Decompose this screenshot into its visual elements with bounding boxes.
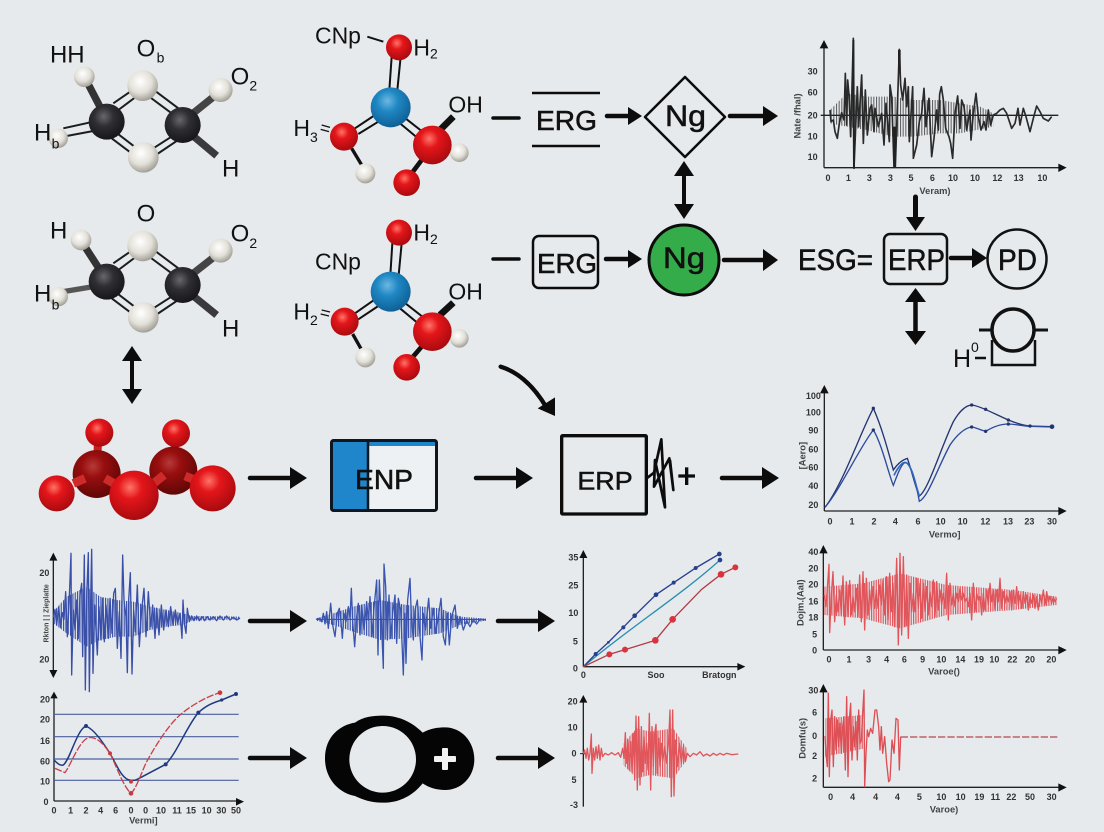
chart: lower left line chart: 0	[51, 806, 56, 816]
chart: right red waveform: 6	[902, 655, 907, 665]
chart: lower left line chart: 0	[43, 797, 48, 807]
chart: right blue double curve: 23	[1024, 517, 1034, 527]
chart: lower left line chart: 0	[143, 806, 148, 816]
chart: right red damped waveform: 19	[974, 792, 984, 802]
chart: lower left blue waveform: 20	[39, 568, 49, 578]
chart: top right black waveform: 12	[992, 173, 1002, 183]
chart: right red waveform: 18	[808, 613, 818, 623]
node: green Ng	[649, 225, 719, 295]
icon: H0 circuit symbol: 0	[971, 339, 979, 355]
chart: right red waveform: 20	[808, 564, 818, 574]
molecule: top left: H	[34, 120, 51, 147]
chart: top right black waveform: 3	[867, 173, 872, 183]
chart: right blue double curve: 20	[808, 500, 818, 510]
chart: right blue double curve: 100	[806, 408, 821, 418]
chart: right red damped waveform: 30	[808, 685, 818, 695]
node: diamond Ng: Ng	[665, 100, 706, 133]
chart: right blue double curve: 13	[1003, 517, 1013, 527]
chart: right red damped waveform: Domfu(s)	[797, 718, 807, 759]
chart: right blue double curve: [Aero]	[797, 442, 807, 469]
chart: right red damped waveform: 4	[850, 792, 855, 802]
chart: right red waveform: 20	[1025, 655, 1035, 665]
chart: right blue double curve: 0	[827, 517, 832, 527]
arrow: blue waveform to filtered waveform	[250, 610, 307, 632]
molecule: second row left: H	[50, 217, 67, 244]
chart: right red waveform: 14	[955, 655, 965, 665]
chart: lower left line chart: 20	[40, 715, 50, 725]
chart: right red damped waveform: 2	[812, 751, 817, 761]
chart: top right black waveform: 6	[930, 173, 935, 183]
molecule: second row center: H	[413, 220, 430, 246]
chart: lower left line chart: 20	[40, 694, 50, 704]
chart: right red waveform: 5	[812, 629, 817, 639]
dash: before top ERG	[493, 116, 519, 120]
chart: right red waveform: 20	[1046, 655, 1056, 665]
icon: ring blob with plus	[325, 716, 474, 803]
chart: right red waveform: 1	[846, 655, 851, 665]
chart: lower left line chart: 16	[40, 736, 50, 746]
molecule: top left: b	[157, 49, 165, 65]
chart: right red waveform: 10	[936, 655, 946, 665]
chart: top right black waveform: 10	[948, 173, 958, 183]
chart: right red waveform: 4	[884, 655, 889, 665]
molecule: red cluster	[39, 419, 236, 520]
chart: lower left line chart: 10	[40, 777, 50, 787]
chart: lower left line chart: 1	[68, 806, 73, 816]
chart: center red waveform	[568, 695, 738, 810]
chart: top right black waveform: 10	[1037, 173, 1047, 183]
chart: right red damped waveform: 11	[991, 792, 1000, 802]
arrow: ERP to PD	[951, 248, 987, 268]
chart: top right black waveform: 60	[808, 88, 818, 98]
chart: right blue double curve: 60	[808, 444, 818, 454]
chart: center red waveform: 10	[568, 723, 578, 733]
chart: lower left line chart: Vermi]	[129, 815, 158, 825]
chart: right red damped waveform: 10	[936, 792, 946, 802]
chart: right blue double curve: 100	[806, 391, 821, 401]
chart: right red damped waveform: 6	[812, 708, 817, 718]
chart: top right black waveform: 20	[808, 111, 818, 121]
molecule: top center: 3	[310, 129, 318, 145]
chart: right red damped waveform: 4	[895, 792, 900, 802]
chart: center red waveform: 0	[571, 749, 576, 759]
chart: lower left line chart	[40, 690, 244, 825]
chart: right red damped waveform: 50	[1025, 792, 1035, 802]
chart: right red waveform: 3	[866, 655, 871, 665]
molecule: second row left: b	[52, 296, 60, 312]
chart: right red waveform: 40	[808, 547, 818, 557]
arrow: chart down to ERP	[906, 197, 925, 231]
arrow: double below ERP	[905, 288, 926, 345]
arrow: center waveform to line chart	[498, 610, 555, 632]
molecule: second row left: O	[231, 221, 249, 248]
chart: top right black waveform: 5	[908, 173, 913, 183]
chart: top right black waveform: 10	[808, 131, 818, 141]
molecule: second row left: 2	[249, 235, 257, 251]
box: second ERG	[533, 236, 598, 288]
chart: top right black waveform: 10	[970, 173, 980, 183]
arrow: green node to ESG	[724, 249, 778, 271]
chart: lower left blue waveform: Rkton | | Zieplatte	[44, 584, 51, 642]
chart: lower left line chart: 60	[40, 757, 50, 767]
chart: center growth lines: 0	[581, 670, 586, 680]
molecule: second row center: CNp	[315, 248, 361, 274]
molecule: second row left: O	[137, 201, 155, 228]
molecule: top left	[34, 36, 257, 183]
chart: top right black waveform	[793, 38, 1067, 196]
chart: lower left line chart: 50	[231, 806, 241, 816]
molecule: top left: O	[231, 63, 249, 90]
chart: center growth lines: 0	[573, 663, 578, 673]
box: second ERG: ERG	[537, 248, 597, 279]
icon: H0 circuit symbol	[953, 309, 1048, 373]
chart: right red damped waveform: 2	[812, 773, 817, 783]
molecule: top center: 2	[430, 46, 438, 62]
chart: right red waveform: Dojm.(AaI)	[795, 579, 805, 626]
chart: center growth lines: 10	[568, 608, 578, 618]
chart: right red damped waveform: 5	[917, 792, 922, 802]
molecule: top center: H	[293, 115, 310, 141]
arrow: blob to red waveform	[498, 747, 555, 769]
chart: center growth lines: Bratogn	[702, 670, 737, 680]
molecule: top left: H	[222, 156, 239, 183]
chart: right red waveform: 0	[826, 655, 831, 665]
chart: right red damped waveform: 30	[1047, 792, 1057, 802]
chart: right blue double curve: 40	[808, 481, 818, 491]
chart: lower left blue waveform: 20	[39, 655, 49, 665]
label: top ERG with rules	[532, 93, 600, 146]
chart: center growth lines	[568, 550, 745, 680]
molecule: second row center: H	[293, 298, 310, 324]
chart: right red damped waveform: Varoe)	[930, 804, 958, 814]
chart: lower left line chart: 10	[202, 806, 212, 816]
chart: right red waveform: 9	[920, 655, 925, 665]
molecule: second row center: 2	[430, 231, 438, 247]
chart: right blue double curve: 10	[936, 517, 946, 527]
box: ERP with waveform and plus	[562, 436, 695, 514]
chart: right red damped waveform: 4	[873, 792, 878, 802]
chart: top right black waveform: 1	[846, 173, 851, 183]
chart: center growth lines: Soo	[648, 670, 665, 680]
molecule: second row center: OH	[448, 278, 483, 304]
chart: right blue double curve	[797, 385, 1067, 540]
molecule: second row left	[34, 201, 257, 343]
arrow: curved into ERP	[501, 367, 555, 416]
chart: lower left line chart: 0	[128, 806, 133, 816]
chart: right red damped waveform: 0	[828, 792, 833, 802]
chart: right red waveform: Varoe()	[928, 666, 960, 676]
chart: center red waveform: 20	[568, 697, 578, 707]
box: ERP with waveform and plus: ERP	[577, 467, 633, 495]
chart: top right black waveform: Veram)	[919, 186, 951, 196]
box: ERP right: ERP	[888, 244, 945, 277]
chart: lower left line chart: 6	[113, 806, 118, 816]
chart: center blue waveform	[316, 564, 486, 675]
chart: right blue double curve: 1	[849, 517, 854, 527]
chart: center red waveform: -3	[570, 800, 578, 810]
chart: right red waveform: 19	[974, 655, 984, 665]
chart: right blue double curve: 2	[871, 517, 876, 527]
chart: right red damped waveform: 22	[1006, 792, 1016, 802]
chart: lower left line chart: 30	[216, 806, 226, 816]
dash: before second ERG	[493, 257, 519, 261]
arrow: second ERG to green node	[606, 250, 642, 268]
chart: lower left line chart: 11	[172, 806, 182, 816]
icon: H0 circuit symbol: H	[953, 345, 971, 373]
molecule: second row left: H	[222, 316, 239, 343]
chart: top right black waveform: 13	[1014, 173, 1024, 183]
chart: right blue double curve: 30	[1047, 517, 1057, 527]
node: PD	[988, 230, 1046, 288]
chart: right red waveform: 0	[812, 645, 817, 655]
molecule: top center: OH	[448, 92, 483, 118]
chart: top right black waveform: 0	[825, 173, 830, 183]
node: diamond Ng	[645, 77, 725, 157]
chart: lower left line chart: 2	[83, 806, 88, 816]
chart: lower left line chart: 4	[98, 806, 103, 816]
chart: right red waveform: 16	[808, 596, 818, 606]
chart: lower left blue waveform	[39, 549, 240, 692]
chart: right red waveform	[795, 545, 1067, 676]
box: ENP: ENP	[355, 464, 413, 495]
arrow: line chart to blob	[250, 747, 307, 769]
box: ERP right	[884, 234, 947, 284]
chart: lower left line chart: 15	[186, 806, 196, 816]
molecule: top left: 2	[249, 78, 257, 94]
molecule: second row center: 2	[310, 312, 318, 328]
molecule: top center: CNp	[315, 22, 361, 48]
arrow: top ERG to diamond	[607, 107, 642, 125]
chart: right blue double curve: 4	[893, 517, 898, 527]
arrow: ENP to ERP	[476, 467, 533, 489]
molecule: second row left: H	[34, 281, 51, 308]
node: green Ng: Ng	[663, 242, 705, 275]
arrow: diamond to top chart	[730, 106, 778, 126]
chart: right blue double curve: 12	[980, 517, 990, 527]
molecule: top left: O	[137, 36, 155, 63]
chart: center growth lines: 35	[568, 553, 578, 563]
arrow: double vertical between molecules and red molecule	[122, 346, 142, 404]
molecule: second row center	[293, 220, 483, 381]
chart: center red waveform: 5	[571, 775, 576, 785]
box: ENP	[331, 440, 437, 511]
label: top ERG with rules: ERG	[536, 105, 597, 136]
chart: right blue double curve: 90	[808, 426, 818, 436]
chart: lower left line chart: 10	[156, 806, 166, 816]
arrow: red molecule to ENP	[250, 467, 307, 489]
chart: right red waveform: 10	[989, 655, 999, 665]
molecule: top center: H	[413, 34, 430, 60]
chart: right blue double curve: 6	[915, 517, 920, 527]
chart: right red waveform: 20	[808, 579, 818, 589]
chart: center growth lines: 25	[568, 580, 578, 590]
chart: right red damped waveform: 10	[956, 792, 966, 802]
molecule: top left: HH	[50, 41, 85, 68]
label: ESG=: ESG=	[798, 244, 873, 277]
chart: right blue double curve: 10	[958, 517, 968, 527]
arrow: double between Ng nodes	[674, 161, 694, 219]
chart: top right black waveform: 10	[808, 152, 818, 162]
chart: right red damped waveform	[797, 684, 1067, 814]
molecule: top center	[293, 22, 483, 196]
chart: top right black waveform: 30	[808, 67, 818, 77]
chart: right blue double curve: 60	[808, 462, 818, 472]
chart: right red damped waveform: 0	[812, 731, 817, 741]
molecule: top left: b	[52, 135, 60, 151]
chart: top right black waveform: Nate /fhal)	[793, 93, 803, 139]
chart: center growth lines: 5	[573, 637, 578, 647]
chart: right blue double curve: Vermo]	[929, 530, 960, 540]
chart: right red waveform: 22	[1007, 655, 1017, 665]
node: PD: PD	[998, 244, 1037, 277]
chart: top right black waveform: 3	[888, 173, 893, 183]
arrow: ERP to right chart	[722, 467, 779, 489]
